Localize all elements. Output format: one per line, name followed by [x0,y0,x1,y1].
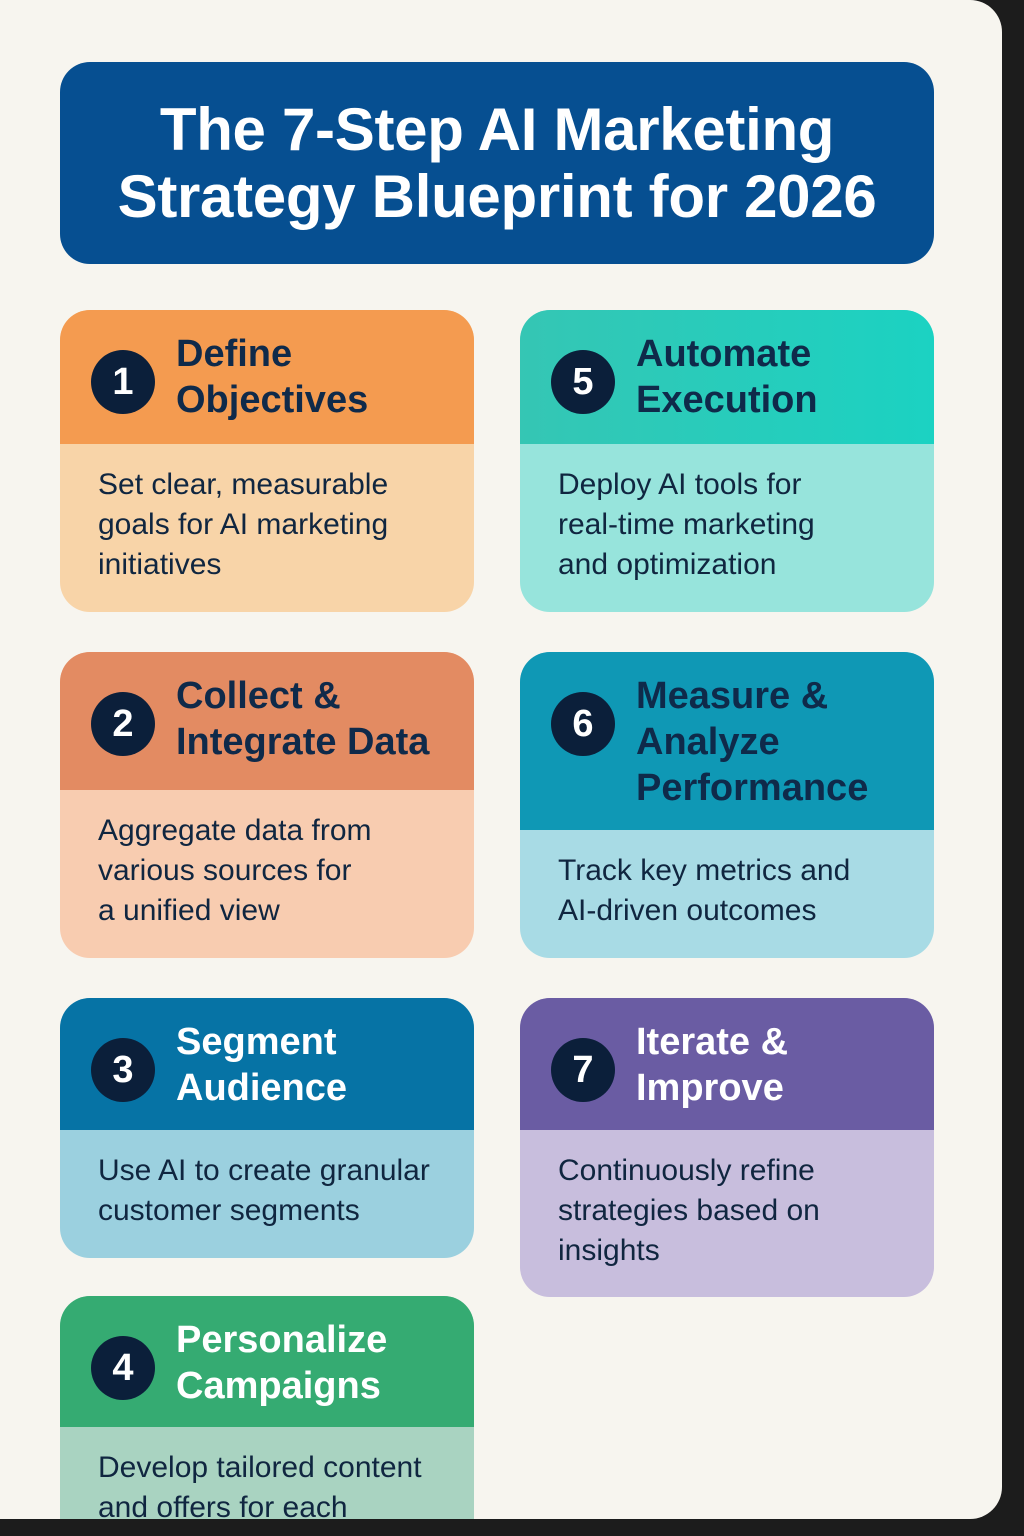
title: Strategy Blueprint for 2026 [118,163,876,230]
header: step 3: Segment [176,1021,336,1063]
body: step 7: Continuously refine [558,1154,815,1187]
body: step 5 [558,468,815,581]
header: step 7: 7 [572,1049,594,1091]
body: step 1 [98,468,388,581]
header: step 3 [60,998,474,1130]
title: The 7-Step AI Marketing [160,96,834,163]
body: step 1: goals for AI marketing [98,508,388,541]
header: step 5 [520,310,934,444]
body: step 1: initiatives [98,548,221,581]
header: step 5: Automate [636,333,811,375]
body: step 2: Aggregate data from [98,814,372,847]
header: step 3: 3 [112,1049,134,1091]
body: step 5: Deploy AI tools for [558,468,801,501]
header: step 7: Improve [636,1067,784,1109]
body: step 3: Use AI to create granular [98,1154,430,1187]
header: step 6 [520,652,934,830]
body: step 4: Develop tailored content [98,1451,422,1484]
header: step 1: Objectives [176,379,368,421]
panel: step 4 [60,1296,474,1536]
panel: step 7 [520,998,934,1297]
body: step 4 [98,1451,422,1519]
panel: step 6 [520,652,934,958]
body: step 5: and optimization [558,548,776,581]
header: step 1: 1 [112,361,134,403]
header: step 2: Collect & [176,675,341,717]
header: step 2: Integrate Data [176,721,429,763]
header: step 7 [520,998,934,1130]
body: step 7: insights [558,1234,660,1267]
body: step 6: Track key metrics and [558,854,850,887]
title [60,62,934,264]
header: step 5: 5 [572,361,594,403]
panel: step 2 [60,652,474,958]
body: step 3 [98,1154,430,1227]
header: step 4 [60,1296,474,1427]
header: step 6: Measure & [636,675,828,717]
header: step 4: 4 [112,1347,134,1389]
body: step 7 [558,1154,820,1267]
header: step 4: Personalize [176,1319,387,1361]
header: step 6: Performance [636,767,868,809]
header: step 1: Define [176,333,292,375]
body: step 6: AI-driven outcomes [558,894,816,927]
header: step 3: Audience [176,1067,347,1109]
header: step 7: Iterate & [636,1021,788,1063]
panel: step 1 [60,310,474,612]
header: step 4: Campaigns [176,1365,381,1407]
header: step 5: Execution [636,379,818,421]
body: step 5: real-time marketing [558,508,815,541]
body: step 7: strategies based on [558,1194,820,1227]
panel: step 3 [60,998,474,1258]
header: step 6: 6 [572,703,594,745]
body: step 2: various sources for [98,854,351,887]
panel: step 5 [520,310,934,612]
header: step 2: 2 [112,703,134,745]
header: step 1 [60,310,474,444]
header: step 2 [60,652,474,790]
body: step 3: customer segments [98,1194,360,1227]
body: step 6 [558,854,850,927]
header: step 6: Analyze [636,721,780,763]
body: step 2 [98,814,372,927]
body: step 1: Set clear, measurable [98,468,388,501]
body: step 2: a unified view [98,894,280,927]
